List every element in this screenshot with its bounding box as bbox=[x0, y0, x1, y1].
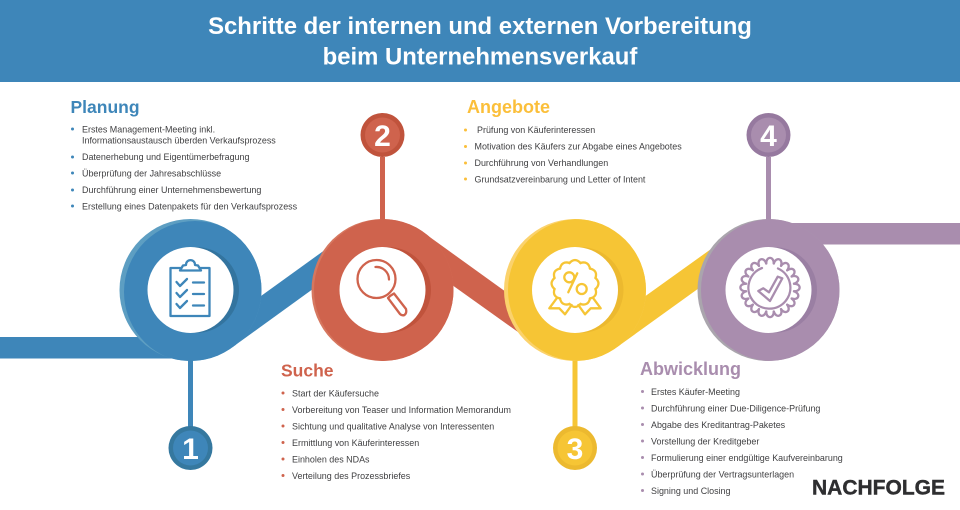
bullet list: Suche: Start der Käufersuche bbox=[292, 388, 379, 398]
title: beim Unternehmensverkauf bbox=[323, 44, 637, 70]
bullet list: Abwicklung: Signing und Closing bbox=[651, 486, 731, 496]
bullet list: Planung: Erstellung eines Datenpakets für den Verkaufsprozess bbox=[82, 202, 298, 212]
bullet list: Abwicklung: Vorstellung der Kreditgeber bbox=[651, 436, 759, 446]
text block: Angebote bbox=[464, 97, 682, 184]
bullet list: Abwicklung: Überprüfung der Vertragsunterlagen bbox=[651, 470, 794, 480]
title bbox=[208, 13, 752, 70]
number badge 4: 4 bbox=[760, 120, 777, 153]
bullet list: Angebote bbox=[464, 125, 682, 184]
bullet list: Suche: Ermittlung von Käuferinteressen bbox=[292, 438, 419, 448]
logo: NACHFOLGE: NACHFOLGE bbox=[812, 476, 945, 500]
step 4 ribbon and ring: Abwicklung bbox=[698, 157, 960, 361]
bullet list: Planung: Datenerhebung und Eigentümerbefragung bbox=[82, 152, 249, 162]
number badge 3: 3 bbox=[567, 433, 583, 466]
bullet list: Abwicklung bbox=[641, 387, 843, 496]
number badge 2 bbox=[360, 113, 404, 157]
text block: Planung bbox=[70, 97, 298, 212]
icon: gear with check mark bbox=[740, 258, 800, 317]
text block: Suche bbox=[281, 360, 511, 481]
heading: Suche: Suche bbox=[281, 360, 334, 380]
heading: Angebote: Angebote bbox=[467, 97, 550, 117]
bullet list: Planung: Durchführung einer Unternehmensbewertung bbox=[82, 185, 261, 195]
title: Schritte der internen und externen Vorbereitung bbox=[208, 13, 752, 40]
icon: magnifying glass bbox=[358, 260, 406, 315]
bullet list: Abwicklung: Formulierung einer endgültige Kaufvereinbarung bbox=[651, 453, 843, 463]
number badge 2: 2 bbox=[374, 120, 391, 153]
bullet list: Abwicklung: Abgabe des Kreditantrag-Paketes bbox=[651, 420, 786, 430]
bullet list: Angebote: Grundsatzvereinbarung und Letter of Intent bbox=[474, 174, 646, 184]
step 1 ribbon and ring: Planung bbox=[0, 219, 340, 433]
heading: Abwicklung: Abwicklung bbox=[640, 359, 741, 379]
bullet list: Planung: Überprüfung der Jahresabschlüsse bbox=[82, 168, 221, 178]
bullet list: Planung: Informationsaustausch überden Verkaufsprozess bbox=[82, 136, 276, 146]
bullet list: Angebote: Durchführung von Verhandlungen bbox=[474, 158, 608, 168]
icon: percent rosette bbox=[549, 260, 601, 314]
bullet list: Angebote: Prüfung von Käuferinteressen bbox=[477, 125, 595, 135]
heading: Planung: Planung bbox=[70, 97, 140, 117]
bullet list: Suche: Einholen des NDAs bbox=[292, 454, 370, 464]
number badge 3 bbox=[553, 426, 597, 470]
bullet list: Abwicklung: Erstes Käufer-Meeting bbox=[651, 387, 740, 397]
bullet list: Abwicklung: Durchführung einer Due-Diligence-Prüfung bbox=[651, 404, 820, 414]
bullet list: Suche: Sichtung und qualitative Analyse von Interessenten bbox=[292, 422, 494, 432]
bullet list: Suche: Verteilung des Prozessbriefes bbox=[292, 471, 411, 481]
bullet list: Planung bbox=[71, 124, 298, 212]
icon: clipboard checklist bbox=[170, 260, 210, 316]
text block: Abwicklung bbox=[640, 359, 843, 496]
number badge 1: 1 bbox=[182, 433, 199, 466]
step 2 ribbon and ring: Suche bbox=[312, 157, 525, 361]
number badge 4 bbox=[746, 113, 790, 157]
bullet list: Planung: Erstes Management-Meeting inkl. bbox=[82, 124, 215, 134]
step 3 ribbon and ring: Angebote bbox=[504, 219, 725, 433]
bullet list: Suche: Vorbereitung von Teaser und Information Memorandum bbox=[292, 405, 511, 415]
header banner bbox=[0, 0, 960, 82]
number badge 1 bbox=[168, 426, 212, 470]
bullet list: Suche bbox=[282, 388, 511, 481]
bullet list: Angebote: Motivation des Käufers zur Abgabe eines Angebotes bbox=[474, 142, 682, 152]
